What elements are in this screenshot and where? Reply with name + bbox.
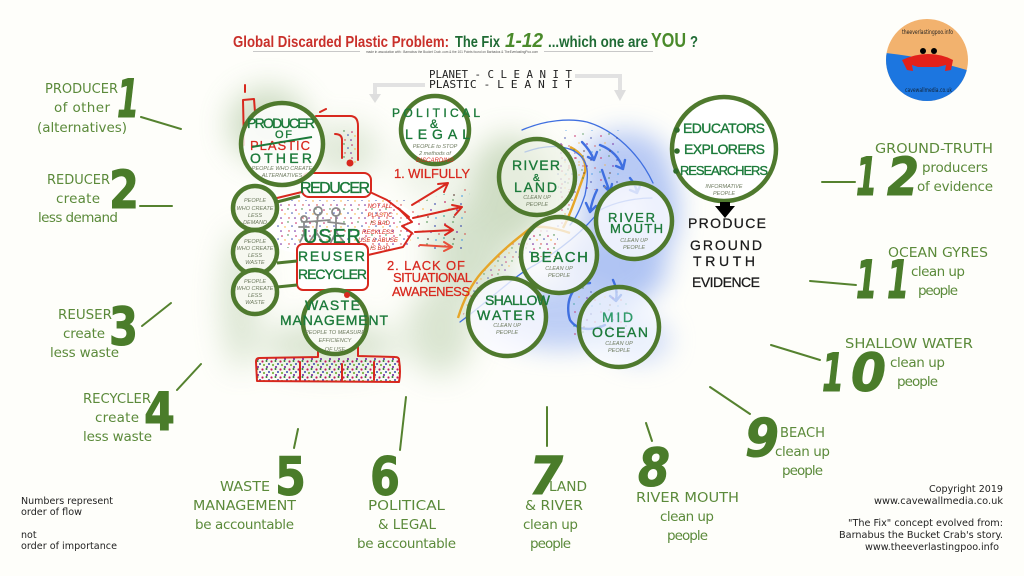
label 4: recycler: create	[95, 410, 139, 426]
label 10: shallow water: 0	[851, 343, 886, 404]
sketch: production pipe	[243, 85, 358, 166]
label: 1. wilfully: 1. WILFULLY	[394, 166, 470, 181]
label 2: reducer: less demand	[38, 210, 118, 226]
circle: people who create less waste (reuse): WASTE	[245, 260, 265, 266]
circle: producer of other: ALTERNATIVES	[261, 173, 303, 179]
circle: producer of other	[241, 103, 323, 185]
circle: educators explorers researchers: INFORMATIVE	[705, 184, 743, 190]
note: not all plastic is bad: RECKLESS	[362, 230, 394, 236]
label 5: waste management	[193, 429, 306, 533]
label 7: land and river: 7	[529, 446, 563, 507]
circle: political and legal: LEGAL	[405, 126, 470, 142]
circle: waste management: EFFICIENCY	[319, 338, 352, 344]
circle: river and land: LAND	[514, 179, 557, 195]
label 6: political and legal: POLITICAL	[368, 498, 446, 514]
sketch: reuser recycler box: REUSER	[298, 248, 365, 264]
note: not all plastic is bad: NOT ALL	[368, 204, 392, 210]
circle: river mouth: PEOPLE	[623, 245, 645, 251]
label 7: land and river	[523, 407, 587, 552]
note: not all plastic is bad	[358, 204, 399, 252]
label 10: shallow water: people	[897, 374, 938, 390]
circle: political and legal: 2 methods of	[418, 151, 451, 157]
label 10: shallow water: 1	[822, 343, 844, 404]
circle: political and legal: DISCARDING	[416, 158, 454, 164]
watercolour wash: land and ocean	[222, 87, 678, 375]
label 12: ground-truth: 1	[856, 147, 877, 208]
note: not all plastic is bad: IS BAD	[370, 246, 390, 252]
label 12: ground-truth	[822, 141, 993, 208]
circle: political and legal: POLITICAL	[392, 106, 480, 120]
label 11: ocean gyres: 1	[856, 250, 877, 311]
label 3: reuser	[50, 297, 171, 361]
label 7: land and river: LAND	[549, 479, 587, 495]
label 5: waste management: 5	[275, 447, 306, 508]
label 3: reuser: REUSER	[58, 307, 112, 323]
label 2: reducer: 2	[109, 160, 139, 221]
label 11: ocean gyres: people	[918, 283, 958, 299]
sketch: user body with speckled plastic	[251, 185, 470, 257]
text: produce ground truth evidence: TRUTH	[693, 253, 755, 269]
label 11: ocean gyres: clean up	[911, 264, 965, 280]
label 6: political and legal: be accountable	[357, 536, 456, 552]
label 12: ground-truth: 2	[887, 147, 919, 208]
sketch: reuser recycler box: RECYCLER	[298, 266, 367, 282]
circle: people who create less waste (reuse): PEOPLE	[244, 239, 266, 245]
circle: waste management: MANAGEMENT	[280, 312, 388, 328]
circle: educators explorers researchers: EXPLORERS	[684, 141, 765, 157]
label 4: recycler	[83, 364, 201, 445]
label 4: recycler: 4	[144, 382, 175, 443]
circle: river mouth: RIVER	[608, 210, 655, 225]
label 4: recycler: less waste	[83, 429, 152, 445]
title: Global Discarded Plastic Problem:	[233, 34, 449, 51]
label 1: producer: (alternatives)	[37, 120, 127, 136]
logo: bucket crab badge: theeverlastingpoo.info	[902, 29, 953, 36]
label: 2. lack of situational awareness: AWARENESS	[392, 284, 470, 299]
note: order of flow: Numbers represent	[21, 496, 113, 507]
title: 1-12	[505, 30, 543, 52]
circle: political and legal	[392, 96, 480, 164]
label 12: ground-truth: of evidence	[917, 179, 993, 195]
label: 2. lack of situational awareness: SITUATIONAL	[393, 270, 472, 285]
circle: beach: PEOPLE	[548, 273, 570, 279]
label 2: reducer: REDUCER	[47, 172, 110, 188]
circle: people who create less demand: WHO CREATE	[237, 206, 274, 212]
circle: waste management: PEOPLE TO MEASURE	[305, 330, 365, 336]
logo: bucket crab badge: cavewallmedia.co.uk	[905, 87, 952, 94]
circle: shallow water: PEOPLE	[496, 330, 518, 336]
label 9: beach: clean up	[775, 444, 830, 460]
label 5: waste management: be accountable	[195, 517, 294, 533]
circle: shallow water: WATER	[477, 307, 535, 323]
label 7: land and river: people	[530, 536, 571, 552]
circle: shallow water	[468, 278, 551, 356]
circle: people who create less waste (recycle): WHO CREATE	[237, 286, 274, 292]
label 9: beach	[710, 387, 830, 479]
title: ?	[690, 34, 698, 51]
circle: people who create less demand: PEOPLE	[244, 198, 266, 204]
label 8: river mouth: RIVER MOUTH	[636, 490, 739, 506]
label 10: shallow water: SHALLOW WATER	[845, 336, 973, 352]
circle: river and land: PEOPLE	[526, 202, 548, 208]
label 9: beach: BEACH	[780, 425, 825, 441]
label 6: political and legal	[357, 397, 456, 552]
label 12: ground-truth: producers	[922, 160, 988, 176]
circle: producer of other: PRODUCER	[247, 115, 315, 131]
label 5: waste management: MANAGEMENT	[193, 498, 297, 514]
circle: waste management: OF USE	[325, 347, 346, 353]
circle: mid ocean	[579, 287, 659, 367]
label 7: land and river: clean up	[523, 517, 578, 533]
label 1: producer: PRODUCER	[45, 81, 118, 97]
circle: people who create less demand: DEMAND	[243, 220, 267, 226]
circle: shallow water: SHALLOW	[485, 292, 551, 308]
circle: waste management: WASTE	[305, 297, 360, 313]
copyright and credits: Copyright 2019	[929, 484, 1003, 495]
circle: producer of other: PLASTIC	[250, 138, 310, 153]
label 9: beach: people	[782, 463, 823, 479]
title: The Fix	[455, 34, 500, 51]
label 5: waste management: WASTE	[220, 479, 270, 495]
circle: people who create less demand	[233, 186, 300, 230]
circle: river and land: CLEAN UP	[523, 195, 551, 201]
circle: river and land	[499, 139, 575, 215]
planet clean it heading with grey arrows: PLASTIC - L E A N I T	[429, 79, 573, 91]
label 10: shallow water: clean up	[890, 355, 945, 371]
circle: mid ocean: CLEAN UP	[605, 341, 633, 347]
sketch: four discard arrows	[412, 183, 462, 251]
label 12: ground-truth: GROUND-TRUTH	[875, 141, 993, 157]
label 8: river mouth: clean up	[660, 509, 714, 525]
text: produce ground truth evidence: GROUND	[690, 237, 762, 253]
note: not all plastic is bad: IS BAD	[370, 221, 390, 227]
circle: educators explorers researchers: PEOPLE	[713, 191, 735, 197]
circle: political and legal: PEOPLE to STOP	[413, 144, 458, 150]
circle: political and legal: &	[430, 117, 438, 131]
circle: producer of other: OF	[275, 129, 292, 141]
circle: people who create less waste (reuse): LESS	[248, 253, 262, 259]
planet clean it heading with grey arrows	[369, 69, 626, 103]
circle: beach: BEACH	[530, 249, 588, 266]
copyright and credits: "The Fix" concept evolved from:	[848, 518, 1003, 529]
circle: producer of other: OTHER	[250, 150, 312, 166]
label 11: ocean gyres: 1	[887, 250, 909, 311]
label 6: political and legal: 6	[370, 447, 400, 508]
label: 2. lack of situational awareness: 2. LACK OF	[387, 258, 465, 273]
label 9: beach: 9	[745, 408, 779, 469]
label 1: producer: 1	[117, 69, 139, 130]
label 7: land and river: & RIVER	[525, 498, 583, 514]
label 1: producer	[37, 69, 181, 136]
circle: people who create less waste (recycle): LESS	[248, 293, 262, 299]
label 1: producer: of other	[54, 100, 110, 116]
label 11: ocean gyres	[810, 245, 988, 311]
label 10: shallow water	[771, 336, 973, 404]
sketch: stick figures	[299, 207, 345, 244]
sketch: user label: USER	[303, 226, 361, 248]
circle: people who create less waste (reuse)	[233, 230, 297, 274]
circle: river and land: &	[533, 173, 540, 184]
logo: bucket crab badge	[885, 18, 970, 103]
sketch: landfill bar	[256, 341, 400, 382]
circle: producer of other: PEOPLE WHO CREATE	[252, 166, 313, 172]
circle: mid ocean: MID	[602, 309, 633, 325]
label 6: political and legal: & LEGAL	[378, 517, 436, 533]
circle: educators explorers researchers: RESEARCHERS	[680, 163, 768, 178]
label 8: river mouth	[636, 423, 739, 544]
circle: people who create less waste (recycle): PEOPLE	[244, 279, 266, 285]
copyright and credits: www.theeverlastingpoo.info	[865, 542, 999, 553]
river delta coastline and currents	[458, 120, 653, 335]
label 3: reuser: 3	[109, 297, 138, 358]
title	[233, 30, 698, 52]
title credit line: made in association with : Barnabus the Bucket Crab .com & the 101 Points found on Barbados & TheEverlastingPoo.com	[366, 50, 538, 54]
sketch: reducer box: REDUCER	[300, 180, 370, 197]
circle: people who create less waste (reuse): WHO CREATE	[237, 246, 274, 252]
circle: educators explorers researchers: EDUCATORS	[683, 120, 765, 136]
label 4: recycler: RECYCLER	[83, 391, 151, 407]
label 8: river mouth: people	[667, 528, 708, 544]
arrow: educators to evidence	[715, 202, 735, 218]
text: produce ground truth evidence: PRODUCE	[688, 215, 766, 231]
circle: river mouth: CLEAN UP	[620, 238, 648, 244]
text: produce ground truth evidence	[688, 215, 766, 290]
sketch: reducer box	[300, 173, 371, 197]
label 2: reducer	[38, 160, 172, 226]
note: order of flow: order of importance	[21, 541, 117, 552]
copyright and credits: www.cavewallmedia.co.uk	[874, 496, 1004, 507]
circle: beach: CLEAN UP	[545, 266, 573, 272]
circle: people who create less waste (recycle): WASTE	[245, 300, 265, 306]
label 3: reuser: less waste	[50, 345, 119, 361]
copyright and credits: Barnabus the Bucket Crab's story.	[839, 530, 1003, 541]
planet clean it heading with grey arrows: PLANET - C L E A N I T	[429, 69, 573, 81]
sketch: reuser recycler box	[297, 244, 368, 290]
note: order of flow: not	[21, 530, 37, 541]
title: ...which one are	[548, 34, 648, 51]
copyright and credits	[839, 484, 1004, 553]
note: order of flow: order of flow	[21, 507, 82, 518]
circle: waste management	[280, 290, 388, 354]
note: not all plastic is bad: PLASTIC	[367, 213, 393, 219]
circle: river and land: RIVER	[512, 157, 560, 173]
label 3: reuser: create	[63, 326, 105, 342]
label 8: river mouth: 8	[638, 438, 670, 499]
circle: river mouth: MOUTH	[610, 221, 663, 236]
circle: river mouth	[596, 183, 672, 259]
note: order of flow	[21, 496, 117, 552]
label: 2. lack of situational awareness	[387, 258, 472, 299]
circle: shallow water: CLEAN UP	[493, 323, 521, 329]
label 2: reducer: create	[56, 191, 100, 207]
title: YOU	[651, 30, 686, 52]
circle: mid ocean: PEOPLE	[608, 348, 630, 354]
note: not all plastic is bad: USE & ABUSE	[358, 238, 399, 244]
circle: educators explorers researchers	[672, 97, 776, 201]
text: produce ground truth evidence: EVIDENCE	[692, 274, 760, 290]
circle: people who create less waste (recycle)	[233, 270, 297, 314]
circle: mid ocean: OCEAN	[592, 324, 648, 340]
circle: people who create less demand: LESS	[248, 213, 262, 219]
label 11: ocean gyres: OCEAN GYRES	[888, 245, 988, 261]
circle: beach	[521, 217, 597, 293]
